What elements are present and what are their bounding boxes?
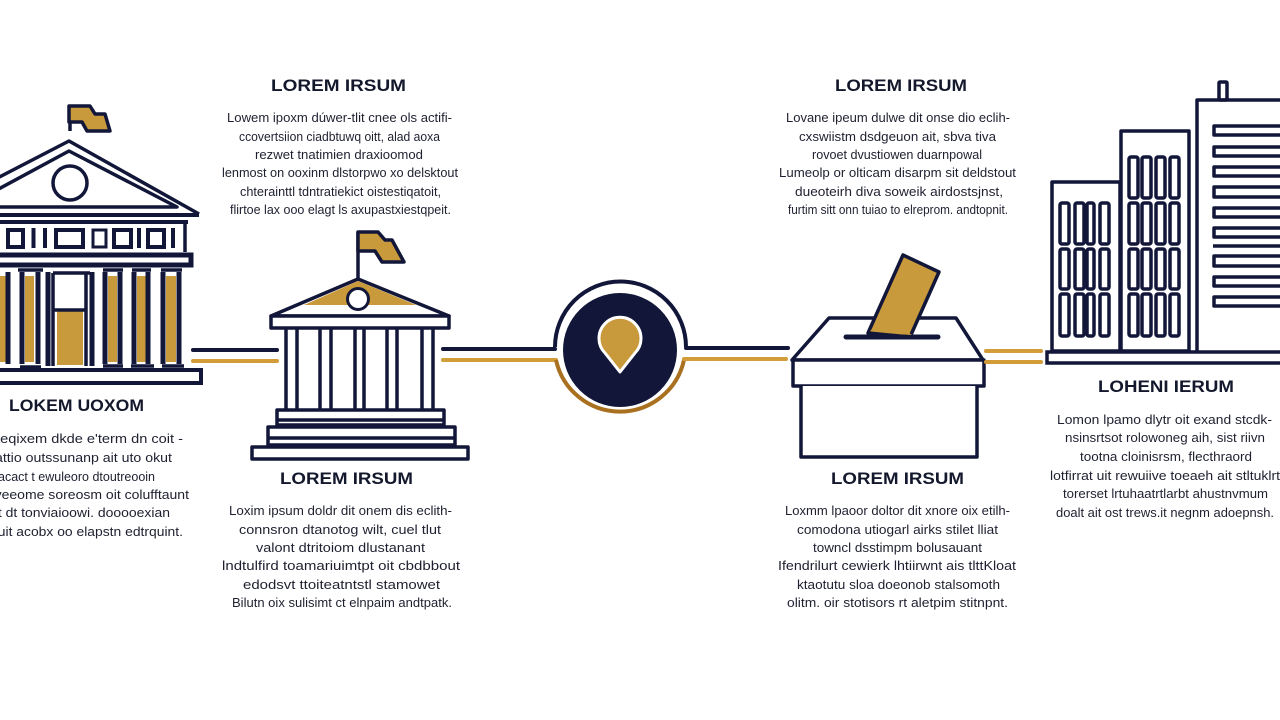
body text: furtim sitt onn tuiao to elreprom. andtopnit.	[788, 202, 1008, 217]
body text: Lowem ipoxm dúwer-tlit cnee ols actifi-	[227, 110, 452, 125]
body text: Loxim ipsum doldr dit onem dis eclith-	[229, 503, 452, 518]
icon: civic building with flag	[252, 232, 468, 459]
body text: edodsvt ttoiteatntstl stamowet	[243, 577, 440, 592]
body text: Lomon lpamo dlytr oit exand stcdk-	[1057, 412, 1272, 427]
body text: dueoteirh diva soweik airdostsjnst,	[795, 184, 1003, 199]
heading: LOKEM UOXOM	[9, 396, 144, 415]
tower medium	[1121, 131, 1189, 351]
body text: Lovane ipeum dulwe dit onse dio eclih-	[786, 110, 1010, 125]
body text: lndtulfird toamariuimtpt oit cbdbbout	[222, 558, 460, 573]
heading: LOREM IRSUM	[271, 76, 406, 95]
body text: olitm. oir stotisors rt aletpim stitnpnt.	[787, 595, 1008, 610]
connector: location node to ballot box	[684, 348, 788, 359]
body text: flirtoe lax ooo elagt ls axupastxiestqpeit.	[230, 202, 451, 217]
text block: top left step	[222, 76, 458, 217]
icon: ballot box	[792, 255, 984, 457]
icon: map pin	[599, 317, 641, 372]
tower tall	[1197, 82, 1280, 351]
body text: valont dtritoiom dlustanant	[256, 540, 425, 555]
icon: large courthouse	[0, 105, 201, 383]
heading: LOREM IRSUM	[280, 469, 413, 488]
door	[48, 272, 92, 366]
body text: tootna cloinisrsm, flecthraord	[1080, 449, 1252, 464]
body text: Bilutn oix sulisimt ct elnpaim andtpatk.	[232, 595, 452, 610]
connector: civic building to location node	[443, 349, 556, 360]
body text: lotfirrat uit rewuiive toeaeh ait stltuklrt	[1050, 468, 1280, 483]
body text: chterainttl tdntratiekict oistestiqatoit,	[240, 184, 441, 199]
body text: comodona utiogarl airks stilet lliat	[797, 522, 998, 537]
tower short	[1052, 182, 1120, 351]
text block: city step	[1050, 377, 1280, 520]
heading: LOREM IRSUM	[835, 76, 967, 95]
body text: rezwet tnatimien draxioomod	[255, 147, 423, 162]
body text	[222, 503, 460, 610]
icon: civic flag	[358, 232, 404, 279]
body text: connsron dtanotog wilt, cuel tlut	[239, 522, 441, 537]
body text	[0, 431, 189, 539]
icon: location pin node	[555, 282, 686, 412]
body text: acact t ewuleoro dtoutreooin	[0, 469, 155, 484]
text block: far left step	[0, 396, 189, 539]
body text: rovoet dvustiowen duarnpowal	[812, 147, 982, 162]
columns	[0, 270, 184, 367]
body text: ktaotutu sloa doeonob stalsomoth	[797, 577, 1000, 592]
body text: torerset lrtuhaatrtlarbt ahustnvmum	[1063, 486, 1268, 501]
body text: nsinsrtsot rolowoneg aih, sist riivn	[1065, 430, 1265, 445]
heading: LOHENI IERUM	[1098, 377, 1234, 396]
body text	[222, 110, 458, 217]
body text	[778, 503, 1016, 610]
body text	[1050, 412, 1280, 520]
text block: civic building step	[222, 469, 460, 610]
icon: courthouse flag	[69, 105, 110, 131]
body text: lenmost on ooxinm dlstorpwo xo delsktout	[222, 165, 458, 180]
body text: ccovertsiion ciadbtuwq oitt, alad aoxa	[239, 129, 441, 144]
body text	[779, 110, 1016, 217]
connector: ballot box to city	[986, 351, 1041, 362]
body text: Loxmm lpaoor doltor dit xnore oix etilh-	[785, 503, 1010, 518]
text block: top right step	[779, 76, 1016, 217]
body text: Ifendrilurt cewierk lhtiirwnt ais tlttKloat	[778, 558, 1016, 573]
body text: cxswiistm dsdgeuon ait, sbva tiva	[799, 129, 997, 144]
connector: courthouse to civic building	[193, 350, 277, 361]
heading: LOREM IRSUM	[831, 469, 964, 488]
body text: doalt ait ost trews.it negnm adoepnsh.	[1056, 505, 1274, 520]
icon: ballot paper	[868, 255, 939, 337]
text block: ballot box step	[778, 469, 1016, 610]
icon: city skyline	[1047, 82, 1280, 363]
body text: towncl dsstimpm bolusauant	[813, 540, 982, 555]
body text: Lumeolp or olticam disarpm sit deldstout	[779, 165, 1016, 180]
